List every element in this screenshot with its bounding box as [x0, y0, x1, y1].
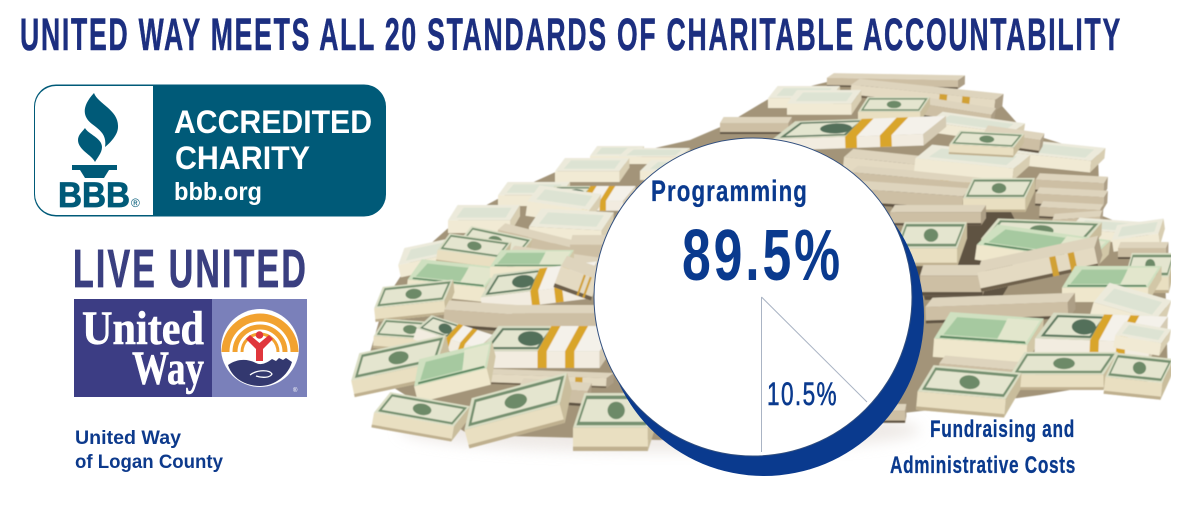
icon: rainbow, person and hand: [221, 309, 299, 387]
money pile photo: [346, 73, 1175, 452]
pie segment: fundraising crescent: [604, 156, 924, 476]
registered mark: ®: [293, 387, 298, 394]
10.5% wedge lines: [762, 297, 867, 452]
BBB wordmark: BBB: [58, 176, 130, 215]
United wordmark: United: [82, 302, 204, 355]
accredited text: ACCREDITED: [174, 104, 372, 140]
charity text: CHARITY: [175, 140, 310, 176]
local chapter name: [75, 428, 223, 473]
registered mark: ®: [131, 196, 140, 210]
live united heading: LIVE UNITED: [73, 239, 308, 299]
fundraising and administrative costs label: [890, 416, 1076, 479]
bbb.org text: bbb.org: [174, 178, 262, 206]
local chapter name: of Logan County: [75, 452, 223, 473]
programming label: Programming: [651, 175, 808, 208]
89.5% value: 89.5%: [682, 216, 843, 296]
pie chart: [594, 138, 924, 476]
pie segment: programming circle: [594, 138, 912, 456]
icon: BBB torch: [72, 93, 118, 178]
10.5% value: 10.5%: [767, 376, 838, 412]
United Way logo: [74, 299, 307, 397]
local chapter name: United Way: [75, 428, 181, 449]
fundraising and administrative costs label: Administrative Costs: [890, 452, 1076, 479]
Way wordmark: Way: [132, 342, 204, 395]
BBB accredited charity badge: [34, 84, 386, 216]
fundraising and administrative costs label: Fundraising and: [930, 416, 1075, 443]
